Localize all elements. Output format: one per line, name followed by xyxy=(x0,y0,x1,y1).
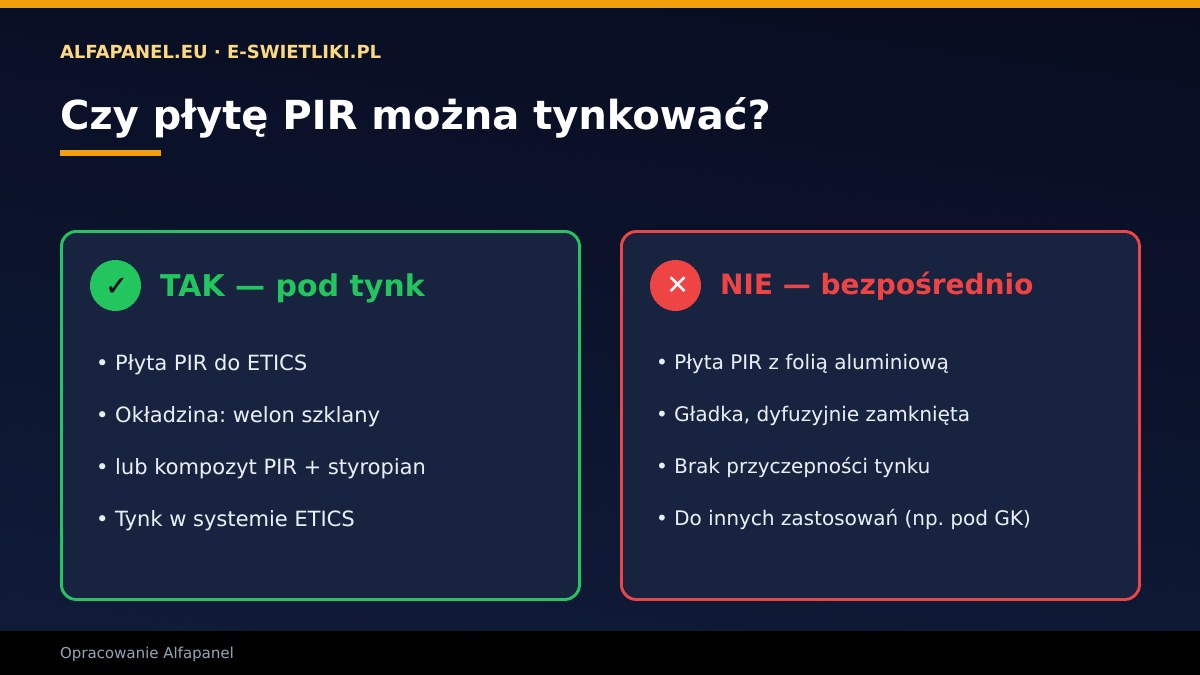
icon: cross circle xyxy=(650,260,701,311)
footer bar xyxy=(0,631,1200,675)
item: • Płyta PIR z folią aluminiową xyxy=(656,350,949,374)
item: • Płyta PIR do ETICS xyxy=(96,351,307,375)
item: • lub kompozyt PIR + styropian xyxy=(96,455,426,479)
top accent bar xyxy=(0,0,1200,8)
panel: NIE xyxy=(620,230,1141,601)
panel background: NIE xyxy=(620,230,1141,601)
footer text: Opracowanie Alfapanel xyxy=(60,644,234,662)
item: • Okładzina: welon szklany xyxy=(96,403,380,427)
icon: check mark circle xyxy=(90,260,141,311)
heading: NIE: NIE — bezpośrednio xyxy=(720,268,1033,301)
item: • Do innych zastosowań (np. pod GK) xyxy=(656,506,1031,530)
brand line: ALFAPANEL.EU · E-SWIETLIKI.PL xyxy=(60,42,381,63)
title underline xyxy=(60,150,161,156)
item: • Tynk w systemie ETICS xyxy=(96,507,355,531)
title: Czy płytę PIR można tynkować? xyxy=(60,93,771,139)
panel: TAK xyxy=(60,230,581,601)
item: • Gładka, dyfuzyjnie zamknięta xyxy=(656,402,970,426)
icon: check mark: ✓ xyxy=(105,271,128,302)
panel background: TAK xyxy=(60,230,581,601)
list: NIE xyxy=(656,350,1031,530)
heading: TAK: TAK — pod tynk xyxy=(160,269,425,304)
item: • Brak przyczepności tynku xyxy=(656,454,930,478)
icon: cross: ✕ xyxy=(666,270,689,301)
list: TAK xyxy=(96,351,426,531)
